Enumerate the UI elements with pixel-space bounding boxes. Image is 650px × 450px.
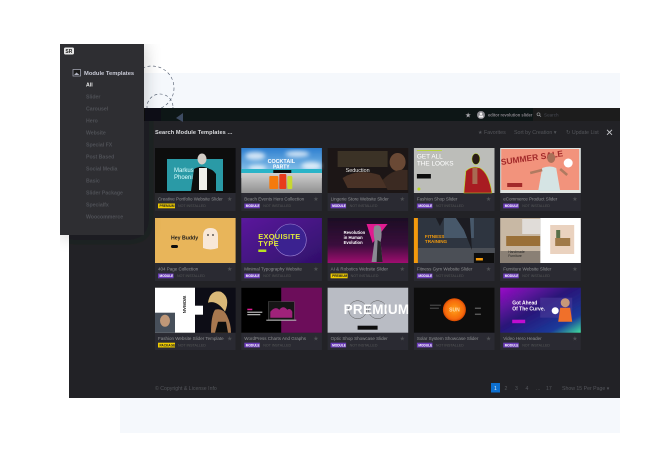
card: Video Hero: Of The Curve. — [512, 307, 546, 313]
card: Lingerie Store: Lingerie Store Website Slider — [331, 197, 389, 202]
panel: sidebar — [60, 44, 144, 235]
card: AI & Robotics — [328, 218, 408, 281]
card: Optic Shop: PREMIUM — [344, 302, 409, 317]
copyright footer: © Copyright & License Info — [155, 385, 217, 392]
card: Lingerie Store: NOT INSTALLED — [350, 204, 378, 208]
icon: templates — [73, 70, 80, 76]
card: Fitness Gym: Fitness Gym Website Slider — [417, 267, 473, 272]
card: WordPress Charts: WordPress Charts And Graphs — [244, 336, 307, 341]
card: Minimal Typography: EXQUISITE — [258, 232, 300, 241]
card: Lingerie Store: MODULE — [332, 204, 346, 208]
card: Lingerie Store — [328, 148, 408, 211]
card: Solar System: Solar System Showcase Slider — [417, 336, 479, 341]
card: eCommerce Product: ★ — [572, 196, 578, 203]
sidebar shadow — [60, 44, 144, 235]
card: AI & Robotics: AI & Robotics Website Slider — [331, 267, 389, 272]
card: Video Hero: ★ — [572, 335, 578, 342]
card: Fashion Website: PACKAGE — [160, 343, 175, 347]
card: Minimal Typography: NOT INSTALLED — [263, 274, 292, 278]
card: 404 Page: ★ — [227, 266, 232, 273]
card: Fashion Website: NOT INSTALLED — [178, 343, 206, 347]
pagination: ... — [536, 386, 540, 392]
card: Furniture: Handmade — [508, 250, 525, 254]
card: Creative Portfolio: PREMIUM — [160, 204, 175, 208]
card: 404 Page — [155, 218, 236, 281]
card: Beach Events: COCKTAIL — [268, 159, 296, 165]
card: Fashion Shop: MODULE — [418, 204, 432, 208]
card: Fashion Shop: NOT INSTALLED — [436, 204, 464, 208]
card: eCommerce Product: SUMMER SALE — [500, 148, 564, 167]
card: WordPress Charts: ★ — [313, 335, 319, 342]
card: Beach Events — [241, 148, 322, 211]
card: AI & Robotics: ★ — [400, 266, 405, 273]
card: Solar System: SUN — [449, 308, 460, 314]
card: 404 Page: NOT INSTALLED — [177, 274, 205, 278]
card: Fashion Shop — [414, 148, 494, 211]
menu items: Hero — [86, 118, 98, 124]
pagination: Show 15 Per Page ▾ — [562, 386, 610, 392]
card: WordPress Charts: NOT INSTALLED — [263, 343, 292, 347]
card: Optic Shop: ★ — [400, 335, 405, 342]
card: Optic Shop: NOT INSTALLED — [350, 343, 378, 347]
card: Creative Portfolio: Creative Portfolio Website Slider — [158, 197, 223, 202]
card: Fashion Website: Fashion Website Slider Template — [158, 336, 224, 341]
card: Furniture: Furniture Website Slider — [503, 267, 552, 272]
menu items: Website — [86, 130, 106, 136]
card: Lingerie Store: ★ — [400, 196, 405, 203]
icon: star: ★ — [465, 112, 471, 120]
card: Fitness Gym: FITNESS — [425, 234, 444, 239]
card: Furniture: ★ — [572, 266, 578, 273]
card: Creative Portfolio: ★ — [227, 196, 232, 203]
card: Fitness Gym — [414, 218, 495, 281]
card: Solar System: ★ — [486, 335, 491, 342]
card: Fitness Gym: NOT INSTALLED — [436, 274, 464, 278]
icon: arrow pointer — [176, 113, 183, 122]
pagination: 17 — [546, 386, 552, 392]
card: Lingerie Store: Seduction — [346, 168, 370, 174]
card: Fashion Shop: ★ — [486, 196, 491, 203]
card: Beach Events: ★ — [313, 196, 319, 203]
card: 404 Page: Hey Buddy — [171, 236, 198, 242]
search field: Search — [544, 113, 559, 118]
card: Solar System — [414, 288, 494, 350]
card: Fashion Website — [155, 288, 236, 350]
card: 404 Page: MODULE — [160, 274, 173, 278]
card: Furniture: NOT INSTALLED — [522, 274, 550, 278]
card: WordPress Charts: MODULE — [246, 343, 260, 347]
card: Minimal Typography — [241, 218, 322, 281]
card: Video Hero: Video Hero Header — [503, 336, 542, 341]
menu items: Social Media — [86, 166, 118, 172]
card: Optic Shop: Optic Shop Showcase Slider — [331, 336, 388, 341]
menu items: Post Based — [86, 154, 114, 160]
menu items: Slider Package — [86, 190, 123, 196]
card: Fitness Gym: TRAINING — [425, 239, 448, 244]
card: Fashion Website: ★ — [227, 335, 232, 342]
card: Video Hero: Got Ahead — [512, 301, 537, 307]
card: Solar System: MODULE — [418, 343, 432, 347]
menu items — [86, 82, 123, 220]
menu items: Special FX — [86, 142, 113, 148]
card: Creative Portfolio: Phoenix — [174, 175, 196, 181]
card: Fitness Gym: MODULE — [418, 274, 432, 278]
card: Furniture: Furniture — [508, 254, 522, 258]
toolbar: ↻ Update List — [566, 130, 599, 136]
card: Fashion Website: WOMAN — [182, 296, 187, 313]
menu items: All — [86, 82, 93, 88]
card: AI & Robotics: Revolution — [344, 230, 366, 235]
card: 404 Page: 404 Page Collection — [158, 267, 199, 272]
card: Beach Events: Beach Events Hero Collection — [244, 197, 305, 202]
search field — [537, 113, 559, 118]
main panel — [69, 108, 620, 398]
card: Furniture: MODULE — [505, 274, 519, 278]
card: Minimal Typography: Minimal Typography Website — [244, 267, 302, 272]
background panel — [120, 73, 620, 433]
card: WordPress Charts — [241, 288, 322, 350]
pagination: 4 — [526, 386, 528, 392]
card: Video Hero: MODULE — [505, 343, 519, 347]
card: AI & Robotics: in Human — [344, 235, 363, 240]
card: eCommerce Product: eCommerce Product Slider — [503, 197, 558, 202]
card: Minimal Typography: MODULE — [246, 274, 260, 278]
card: Creative Portfolio — [155, 148, 236, 211]
card: Video Hero — [500, 288, 581, 350]
card: Fashion Shop: GET ALL — [417, 154, 443, 160]
toolbar: Sort by Creation ▾ — [514, 130, 557, 136]
menu items: Woocommerce — [86, 214, 123, 220]
logo: SR — [65, 49, 73, 55]
card: Solar System: NOT INSTALLED — [436, 343, 464, 347]
menu items: Basic — [86, 178, 100, 184]
card: Fashion Shop: Fashion Shop Slider — [417, 197, 458, 202]
menu title: Module Templates — [84, 71, 134, 77]
menu items: Carousel — [86, 106, 109, 112]
card: Optic Shop — [328, 288, 409, 350]
card: eCommerce Product: NOT INSTALLED — [522, 204, 550, 208]
user name: editor revolution slider — [488, 112, 533, 117]
menu items: Slider — [86, 94, 100, 100]
icon: avatar — [477, 111, 485, 119]
card: Fitness Gym: ★ — [486, 266, 491, 273]
card: Minimal Typography: ★ — [313, 266, 319, 273]
page content — [60, 44, 620, 433]
card: Optic Shop: MODULE — [332, 343, 346, 347]
pagination: 2 — [504, 386, 508, 392]
card: AI & Robotics: NOT INSTALLED — [351, 274, 379, 278]
pagination — [491, 383, 610, 392]
card: eCommerce Product: MODULE — [505, 204, 519, 208]
pagination: 1 — [494, 386, 497, 392]
card: Video Hero: NOT INSTALLED — [522, 343, 550, 347]
menu items: Specialfx — [86, 202, 109, 208]
card: Minimal Typography: TYPE — [258, 239, 279, 248]
card: Fashion Shop: THE LOOKS — [417, 160, 453, 168]
card: Beach Events: MODULE — [246, 204, 260, 208]
card: Furniture — [500, 218, 581, 281]
logo — [64, 48, 74, 55]
card: eCommerce Product — [500, 148, 581, 211]
pagination: 3 — [515, 386, 518, 392]
card: Creative Portfolio: NOT INSTALLED — [178, 204, 206, 208]
toolbar — [478, 130, 599, 136]
toolbar: ★ Favorites — [478, 130, 506, 136]
top bar — [69, 108, 620, 122]
icon: close — [607, 130, 612, 135]
decorative dashed circles — [130, 66, 174, 120]
card: Beach Events: PARTY — [273, 164, 290, 170]
heading: Search Module Templates ... — [155, 130, 233, 136]
card: Beach Events: NOT INSTALLED — [263, 204, 292, 208]
card: AI & Robotics: Evolution — [344, 240, 363, 245]
card: Creative Portfolio: Markus — [174, 168, 194, 174]
card: AI & Robotics: PREMIUM — [332, 274, 347, 278]
